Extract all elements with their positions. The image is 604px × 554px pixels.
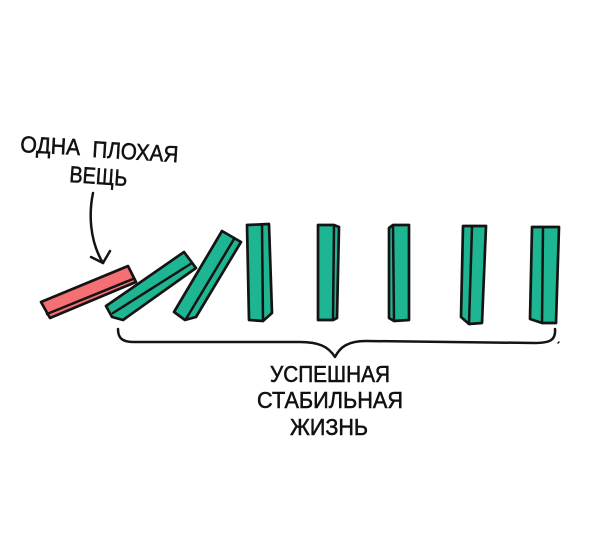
green domino 4: standing xyxy=(318,225,339,320)
label: successful stable life: СТАБИЛЬНАЯ xyxy=(257,387,403,413)
label: one bad thing: ПЛОХАЯ xyxy=(92,136,179,167)
green domino 6: standing xyxy=(461,226,486,324)
label: one bad thing: ОДНА xyxy=(20,131,82,160)
label: successful stable life: ЖИЗНЬ xyxy=(290,414,368,440)
green domino 3: standing xyxy=(247,224,272,321)
label: successful stable life: УСПЕШНАЯ xyxy=(270,361,390,387)
label: successful stable life xyxy=(257,361,403,440)
green domino 7: standing xyxy=(530,227,559,323)
arrow: points to red domino xyxy=(91,193,110,263)
label: one bad thing: ВЕЩЬ xyxy=(69,161,128,191)
curly brace xyxy=(118,329,559,357)
green domino 2: falling xyxy=(174,231,241,320)
label: one bad thing xyxy=(20,131,179,191)
red domino: fallen xyxy=(41,266,136,318)
green domino 5: standing xyxy=(389,225,409,321)
green domino 1: falling xyxy=(106,252,196,320)
